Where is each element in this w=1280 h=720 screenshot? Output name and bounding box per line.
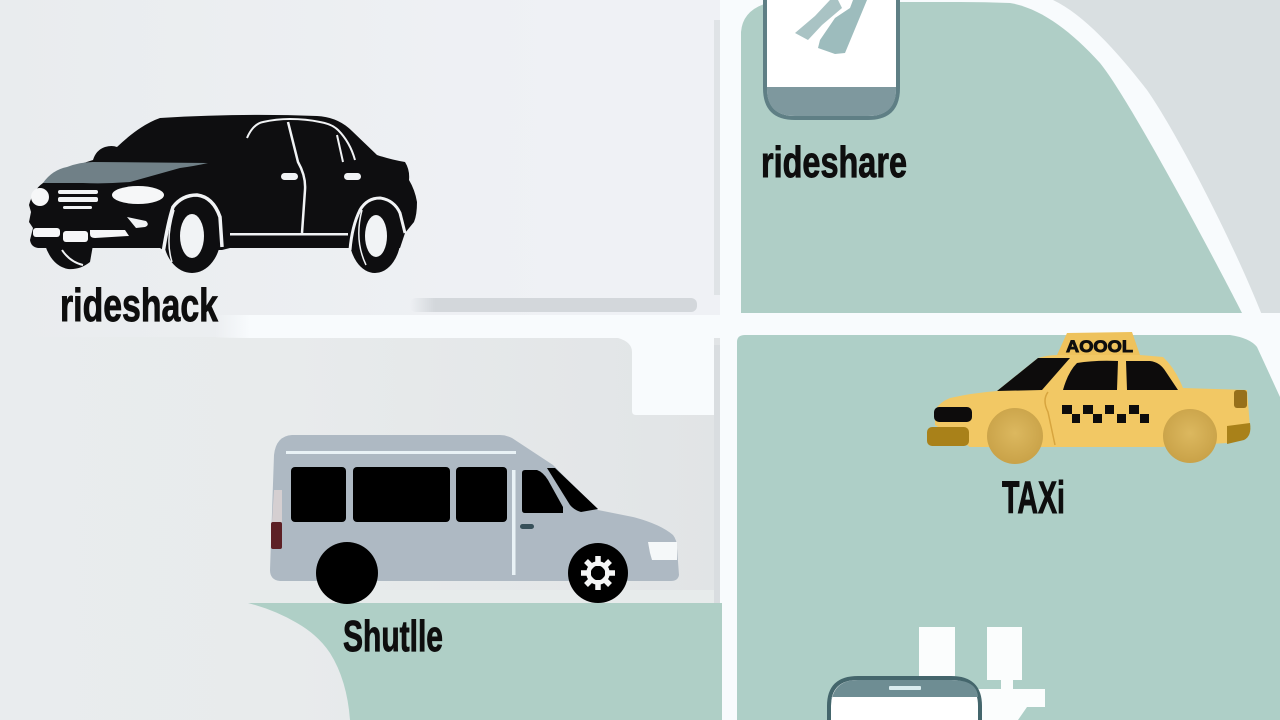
icon: charging plug — [919, 627, 1045, 720]
icon: lower phone — [829, 678, 980, 720]
label: TAXi: TAXi — [1002, 472, 1065, 523]
icon: yellow taxi — [927, 332, 1250, 464]
panel: lower right green block — [737, 335, 1280, 720]
icon: yellow taxi: AOOOL — [1066, 337, 1133, 356]
panel: lower left green block — [248, 603, 722, 720]
icon: black sedan — [29, 115, 417, 273]
label: rideshack: rideshack — [60, 279, 218, 331]
label: Shuttle: Shutlle — [343, 612, 443, 661]
label: rideshare: rideshare — [761, 138, 907, 187]
icon: upper phone — [765, 0, 898, 118]
panel: upper green block — [741, 2, 1242, 313]
icon: shuttle van — [270, 435, 679, 604]
